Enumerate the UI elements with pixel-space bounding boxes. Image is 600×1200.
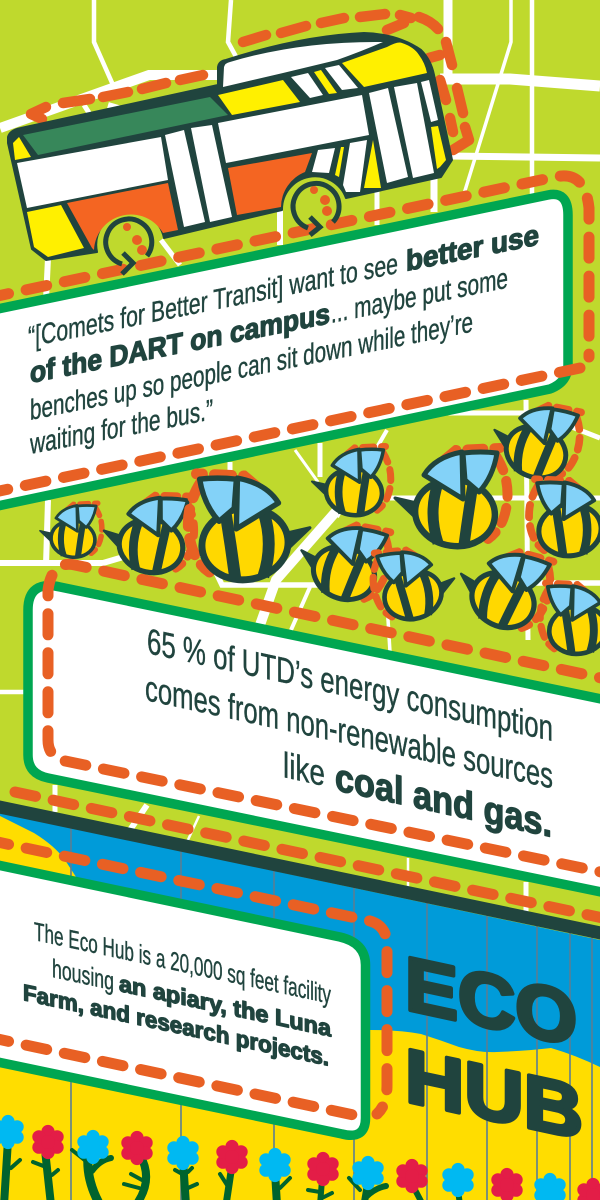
text: energy fact xyxy=(145,620,553,846)
quote line 4: waiting for the bus.” xyxy=(29,394,213,461)
bee 8 xyxy=(291,512,396,612)
blue flowers xyxy=(0,1115,566,1200)
flower stems xyxy=(4,1140,460,1200)
bee 4 xyxy=(312,446,391,519)
energy line 3: like xyxy=(283,744,325,794)
description line 2 bold: an apiary, the Luna xyxy=(119,970,332,1042)
description line 3 bold: Farm, and research projects. xyxy=(23,979,329,1071)
bee 2 xyxy=(101,491,197,579)
description line 2: housing xyxy=(52,953,114,996)
quote line 2 bold: of the DART on campus xyxy=(30,297,330,390)
heading: Eco Hub xyxy=(405,941,583,1156)
bee swarm xyxy=(40,393,600,658)
bus body outline xyxy=(8,33,452,260)
dashed route: Eco Hub panel top and side xyxy=(0,840,387,1114)
heading word HUB: HUB xyxy=(405,1033,583,1156)
bus wheel: rear xyxy=(106,219,152,274)
bee 10 xyxy=(448,536,559,642)
text: transit quote xyxy=(28,219,539,461)
panel: transit quote xyxy=(0,194,568,508)
bee 3 xyxy=(188,474,310,585)
bee 5 xyxy=(395,448,508,551)
bus orange panels xyxy=(67,153,312,250)
panel: Eco Hub description xyxy=(0,863,366,1135)
red flowers xyxy=(32,1125,600,1200)
bee 6 xyxy=(485,393,587,490)
energy line 3 bold: coal and gas. xyxy=(335,755,552,846)
bus illustration xyxy=(8,33,452,260)
dashed route: energy panel xyxy=(48,564,600,880)
quote line 1: “[Comets for Better Transit] want to see xyxy=(28,247,398,354)
heading word ECO: ECO xyxy=(405,941,577,1063)
map roads xyxy=(0,0,600,916)
bus roof stripe xyxy=(23,97,228,155)
dark diagonal band xyxy=(0,805,600,935)
bus white panels xyxy=(17,42,438,227)
quote line 2: ... maybe put some xyxy=(331,262,508,330)
bee 9 xyxy=(369,543,460,628)
bus yellow panels xyxy=(13,42,446,257)
bus wheel: front xyxy=(293,183,339,235)
Eco Hub backdrop: sky and field xyxy=(0,813,600,1200)
flower row xyxy=(0,1115,600,1200)
quote line 1 bold: better use xyxy=(406,219,539,278)
dashed route around the bus xyxy=(31,14,469,150)
bee 11 xyxy=(540,583,600,658)
dashed route: above dark band xyxy=(15,792,600,926)
text: Eco Hub description xyxy=(23,916,332,1071)
dashed route: transit panel bottom xyxy=(0,368,580,493)
description line 1: The Eco Hub is a 20,000 sq feet facility xyxy=(34,916,332,1010)
dashed route: transit panel top and side xyxy=(0,176,589,357)
bee 1 xyxy=(40,503,102,560)
bee 7 xyxy=(529,479,600,560)
dashed route: Eco Hub panel bottom xyxy=(0,1037,363,1117)
panel: energy fact xyxy=(28,586,600,900)
